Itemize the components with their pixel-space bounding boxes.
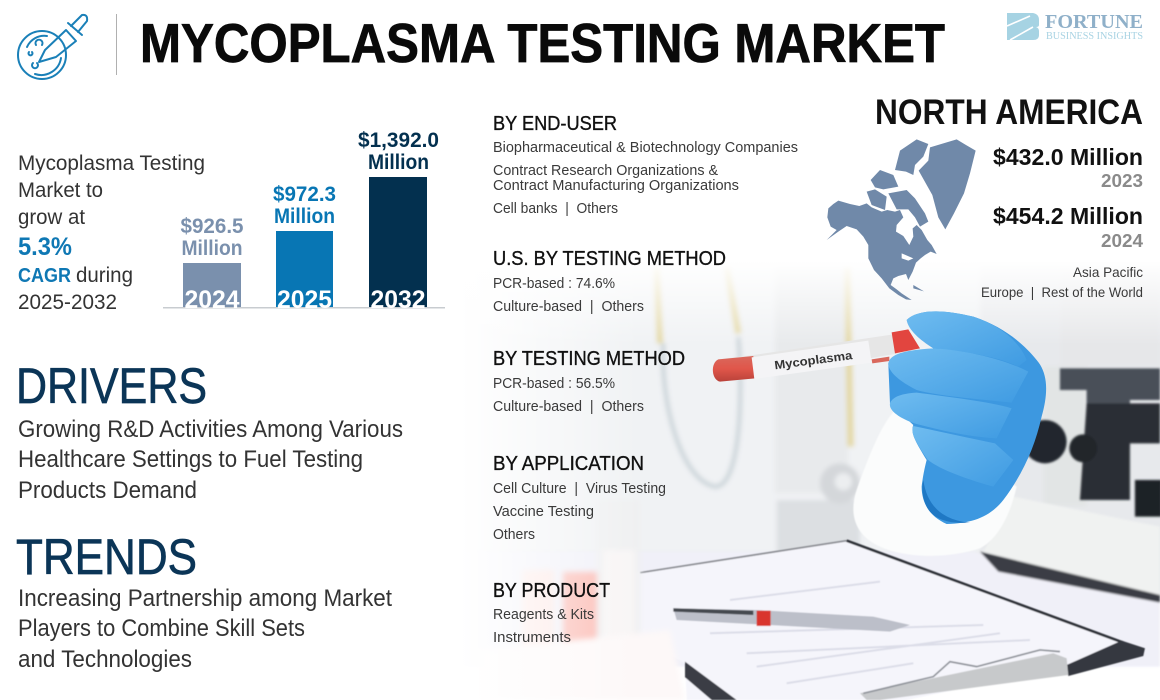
market growth text: Mycoplasma Testing <box>18 152 205 175</box>
logo: Fortune Business Insights: BUSINESS INSIGHTS <box>1046 31 1143 42</box>
segment: by end-user: Contract Manufacturing Organizations <box>493 177 739 194</box>
segment: U.S. by testing method: U.S. BY TESTING METHOD <box>493 248 726 270</box>
drivers <box>16 358 403 504</box>
segment: by product <box>493 580 610 646</box>
region panel: North America: 2024 <box>1101 231 1143 251</box>
segment: by testing method: PCR-based : 56.5% <box>493 375 615 392</box>
market growth text: grow at <box>18 206 85 229</box>
icon: petri dish and pipette <box>18 15 87 79</box>
segment: by application: BY APPLICATION <box>493 453 644 475</box>
segment: by application: Cell Culture | Virus Testing <box>493 480 666 497</box>
segment: U.S. by testing method <box>493 248 726 315</box>
bar chart: Million <box>182 237 242 260</box>
region panel: North America: $454.2 Million <box>993 203 1143 229</box>
region panel: North America <box>875 93 1143 300</box>
drivers: Products Demand <box>18 477 197 504</box>
trends <box>16 529 392 673</box>
segment: by end-user: Biopharmaceutical & Biotechnology Companies <box>493 139 798 156</box>
glove <box>888 311 1046 524</box>
bar chart: $926.5 <box>180 215 244 238</box>
test tube: Mycoplasma <box>774 348 853 372</box>
drivers: Healthcare Settings to Fuel Testing <box>18 446 363 473</box>
drivers: DRIVERS <box>16 358 207 414</box>
bar chart: 2025 <box>277 286 332 314</box>
region panel: North America: $432.0 Million <box>993 144 1143 170</box>
segment: by end-user: Contract Research Organizations & <box>493 162 718 179</box>
trends: and Technologies <box>18 646 192 673</box>
market growth text: Market to <box>18 179 103 202</box>
bar chart: $1,392.0 <box>358 129 439 152</box>
bar chart: Million <box>274 205 335 228</box>
drivers: Growing R&D Activities Among Various <box>18 416 403 443</box>
title: MYCOPLASMA TESTING MARKET <box>140 12 945 74</box>
segment: by testing method: Culture-based | Others <box>493 398 644 415</box>
segment: by application <box>493 453 666 543</box>
segment: by end-user: Cell banks | Others <box>493 200 618 217</box>
segment: by product: Instruments <box>493 629 571 646</box>
segment: by product: BY PRODUCT <box>493 580 610 602</box>
segment: U.S. by testing method: Culture-based | Others <box>493 298 644 315</box>
region panel: North America: 2023 <box>1101 171 1143 191</box>
beakers <box>480 500 685 700</box>
photo: gloved hand holding test tube <box>713 311 1046 524</box>
header: icon and title <box>18 12 945 79</box>
region panel: North America: Asia Pacific <box>1073 264 1143 280</box>
trends: TRENDS <box>16 529 197 585</box>
segment: by end-user <box>493 113 798 217</box>
region panel: North America: Europe | Rest of the World <box>981 284 1143 300</box>
market growth text: CAGR <box>18 265 71 287</box>
segment: by end-user: BY END-USER <box>493 113 617 135</box>
bar chart: 2032 <box>370 286 426 314</box>
trends: Increasing Partnership among Market <box>18 585 392 612</box>
segment: by application: Others <box>493 526 535 543</box>
logo: Fortune Business Insights <box>1007 11 1143 42</box>
bar chart: $972.3 <box>273 183 336 206</box>
test tube <box>713 329 920 382</box>
market growth text <box>18 152 205 314</box>
segment: by testing method: BY TESTING METHOD <box>493 348 685 370</box>
segment: by testing method <box>493 348 685 415</box>
logo: Fortune Business Insights: FORTUNE <box>1045 11 1143 33</box>
market growth text: 2025-2032 <box>18 291 117 314</box>
segment: U.S. by testing method: PCR-based : 74.6% <box>493 275 615 292</box>
market growth text: during <box>76 264 133 287</box>
bar chart: 2024 <box>184 286 240 314</box>
segment: by product: Reagents & Kits <box>493 606 594 623</box>
map: North America <box>827 139 976 300</box>
trends: Players to Combine Skill Sets <box>18 615 305 642</box>
bar chart <box>163 129 445 314</box>
market growth text: 5.3% <box>18 233 72 261</box>
segment: by application: Vaccine Testing <box>493 503 594 520</box>
bar chart: Million <box>368 151 429 174</box>
